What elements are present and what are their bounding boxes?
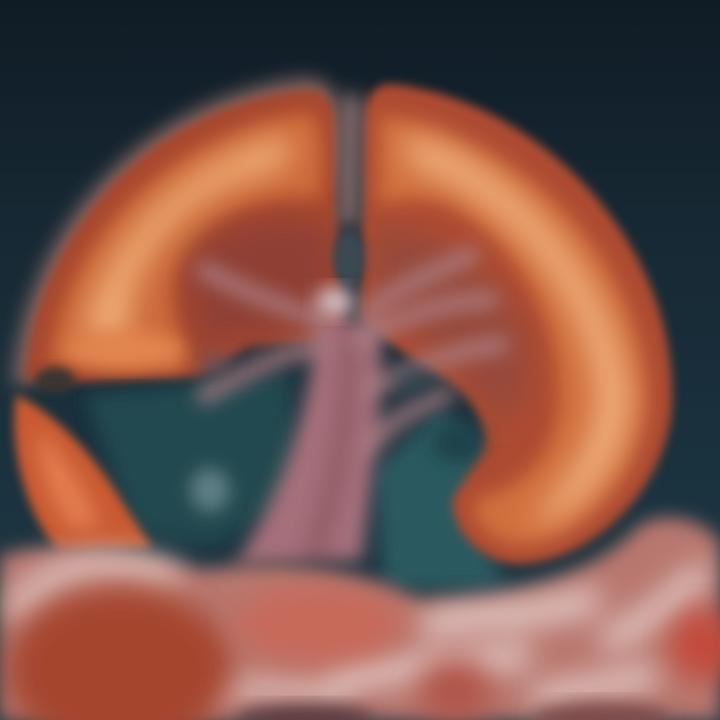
pale node	[315, 287, 355, 317]
dark spots beside vessels	[190, 355, 484, 512]
left lower bright patch	[65, 332, 185, 368]
right lobe highlight	[405, 135, 628, 528]
right lobe outer rim	[362, 84, 672, 564]
main trunk	[235, 320, 381, 565]
left lower orange lobe	[14, 395, 152, 552]
renal pelvis dark spot	[333, 230, 365, 286]
left lower highlight	[38, 430, 100, 530]
right lobe orange band	[378, 115, 646, 545]
lower tissue mass	[0, 518, 720, 720]
centre mass	[235, 587, 405, 663]
left lobe orange band	[50, 112, 323, 370]
renal vessel tree	[205, 255, 500, 565]
pale highlights	[15, 565, 700, 700]
teal interior behind the vessels	[85, 375, 505, 590]
left lobe outer rim	[25, 89, 340, 382]
left lobe pale halo	[12, 78, 342, 385]
right kidney lobe	[362, 84, 672, 564]
left kidney lobe	[12, 78, 342, 552]
branches	[205, 255, 500, 450]
tissue base	[0, 518, 720, 720]
left lobe dark inner	[185, 219, 335, 350]
lower masses	[417, 658, 493, 720]
large round mass	[8, 588, 232, 720]
right lobe dark inner	[372, 229, 528, 425]
trunk shade	[315, 340, 350, 550]
dark notch	[35, 367, 75, 393]
central gap	[338, 95, 362, 225]
left lobe highlight	[82, 135, 292, 345]
